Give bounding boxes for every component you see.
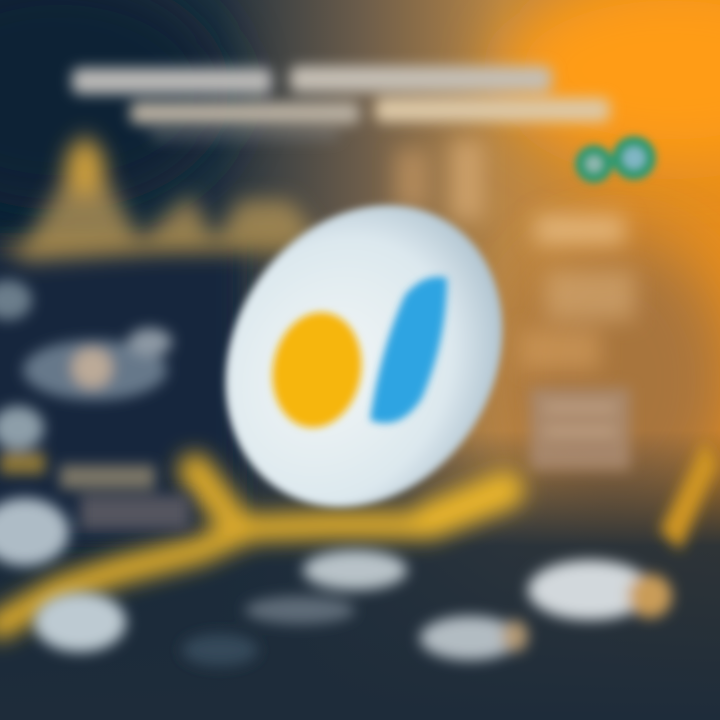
blue bar — [370, 277, 447, 423]
icon: green and blue badge — [575, 136, 656, 183]
gold coin — [264, 305, 370, 435]
chart: central disc with gold coin and blue bar — [170, 153, 558, 559]
panel: blurred data table — [530, 388, 630, 470]
text block: blurred right column — [520, 215, 635, 370]
panel: left side clouds and coins — [0, 280, 190, 566]
arrow: winding golden path — [0, 470, 505, 625]
arrow: gold streak at right — [660, 440, 718, 550]
panel: bottom clouds — [34, 550, 672, 666]
title: blurred headline — [72, 66, 610, 140]
disc body — [170, 153, 558, 559]
chart: golden mountain peaks behind the title — [0, 130, 484, 262]
